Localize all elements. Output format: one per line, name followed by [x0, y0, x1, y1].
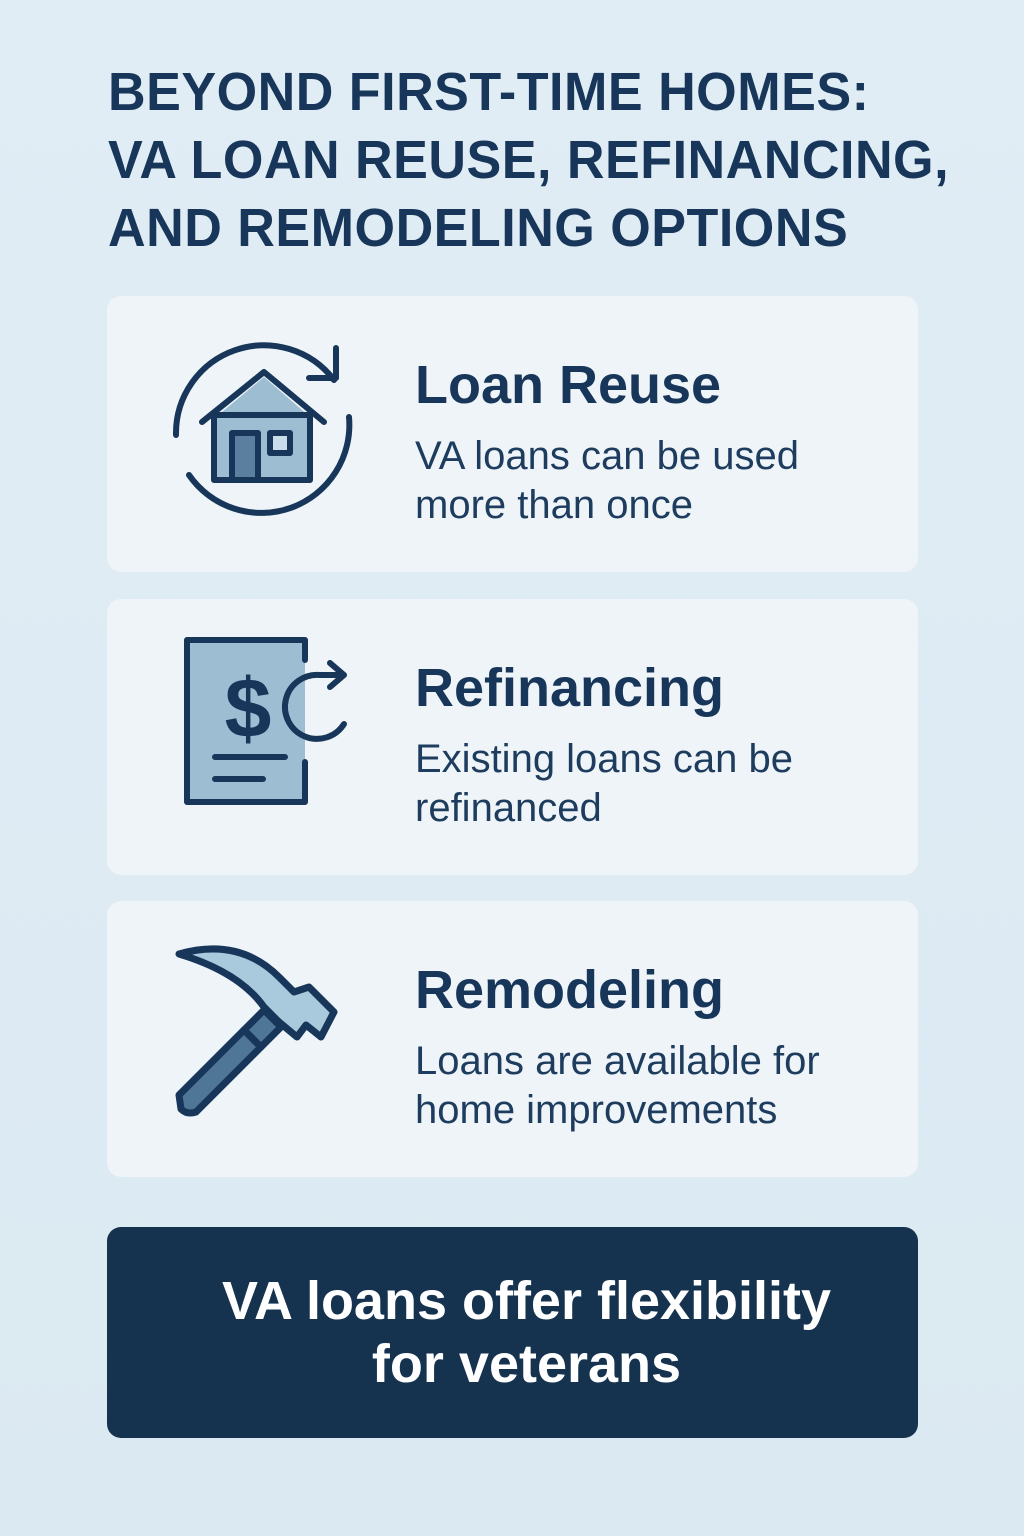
icon: hammer: [176, 945, 338, 1116]
text: home improvements: [415, 1088, 777, 1132]
panel: refinancing: [107, 599, 918, 875]
icon: house with circular arrow: [172, 342, 352, 516]
heading: Loan Reuse: [415, 355, 721, 415]
text: [415, 434, 799, 527]
text: [415, 1039, 820, 1132]
text: more than once: [415, 483, 693, 527]
heading: Remodeling: [415, 960, 724, 1020]
banner: conclusion: for veterans: [372, 1334, 681, 1394]
text: [415, 737, 793, 830]
heading: Refinancing: [415, 658, 724, 718]
banner: conclusion: [107, 1227, 918, 1438]
panel: loan reuse: [107, 296, 918, 572]
text: refinanced: [415, 786, 602, 830]
text: Loans are available for: [415, 1039, 820, 1083]
title: BEYOND FIRST-TIME HOMES:: [108, 62, 869, 122]
text: Existing loans can be: [415, 737, 793, 781]
title: [108, 62, 949, 258]
title: VA LOAN REUSE, REFINANCING,: [108, 130, 949, 190]
panel: remodeling: [107, 901, 918, 1177]
icon: document with dollar and refresh arrow: $: [225, 661, 271, 755]
text: VA loans can be used: [415, 434, 799, 478]
icon: document with dollar and refresh arrow: [184, 637, 347, 805]
title: AND REMODELING OPTIONS: [108, 198, 848, 258]
banner: conclusion: VA loans offer flexibility: [222, 1271, 831, 1331]
